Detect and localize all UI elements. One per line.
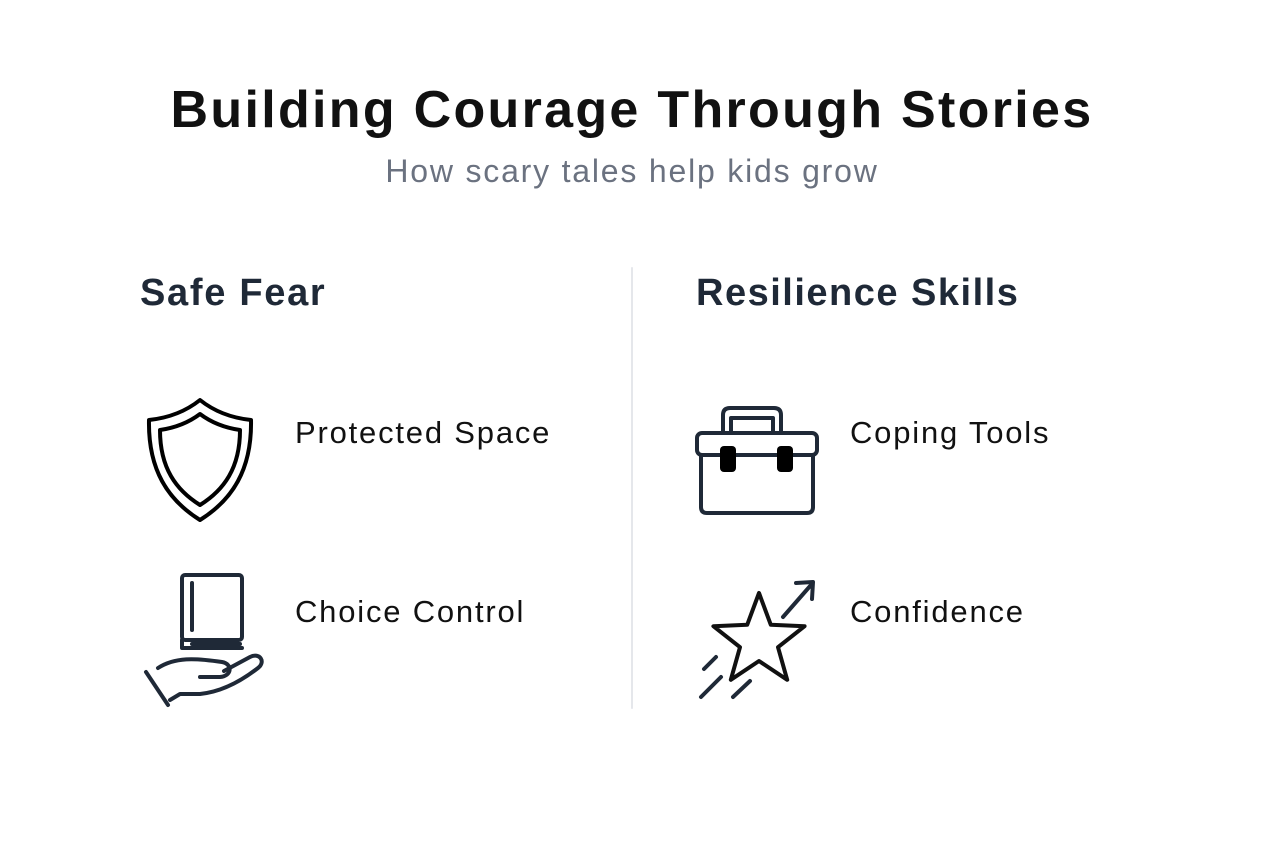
icon: book on hand bbox=[146, 575, 262, 705]
icon: shield bbox=[149, 400, 251, 520]
label: Confidence: Confidence bbox=[850, 594, 1025, 629]
label: Choice Control: Choice Control bbox=[295, 594, 525, 629]
label: Protected Space: Protected Space bbox=[295, 415, 551, 450]
subtitle: How scary tales help kids grow bbox=[385, 153, 879, 189]
icon: toolbox bbox=[697, 408, 817, 513]
heading: Safe Fear: Safe Fear bbox=[140, 272, 326, 314]
icon: star with arrow bbox=[701, 582, 813, 697]
label: Coping Tools: Coping Tools bbox=[850, 415, 1050, 450]
heading: Resilience Skills: Resilience Skills bbox=[696, 272, 1019, 314]
title: Building Courage Through Stories bbox=[171, 81, 1093, 139]
